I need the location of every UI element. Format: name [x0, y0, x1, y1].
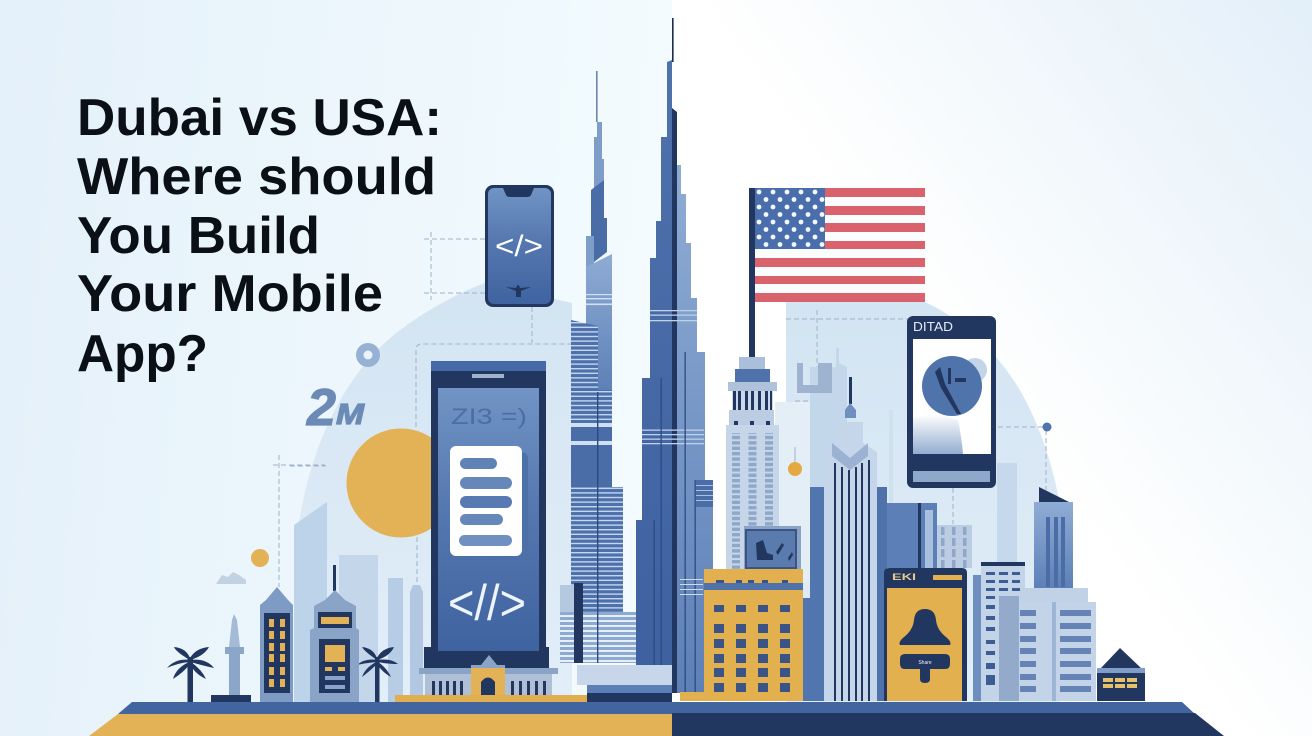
- icon: large sun circle: [346, 428, 456, 538]
- right Burj tower: [636, 18, 713, 693]
- minaret: [211, 614, 251, 702]
- banded office block: [1020, 588, 1096, 701]
- blue blocks right of skyscraper: [803, 487, 972, 701]
- icon: ring: [356, 343, 380, 367]
- label: 2M: 2: [306, 379, 336, 437]
- icon: small sun: [251, 549, 269, 567]
- phone header label: EKI: [892, 572, 916, 582]
- code symbol: </>: [495, 230, 543, 263]
- phone card shadow: [456, 452, 528, 565]
- top phone: [485, 185, 554, 307]
- title: [77, 89, 442, 383]
- palm tree left: [167, 647, 214, 702]
- flag: [749, 188, 925, 357]
- building with antenna: [310, 565, 359, 702]
- background skyline, left: [294, 502, 423, 702]
- palm tree right: [357, 647, 398, 702]
- plane icon: [506, 285, 531, 297]
- window tower: [973, 562, 1025, 701]
- title: Dubai vs USA:: [77, 89, 442, 147]
- tower under flag: [726, 357, 779, 570]
- label: 2M: M: [336, 399, 365, 431]
- notification phone: [884, 568, 967, 701]
- bell clapper button: Share: [918, 660, 932, 666]
- building with orange windows: [260, 587, 293, 702]
- phone screen label: ZI3 =): [451, 404, 527, 429]
- glyph on background building: [797, 363, 832, 393]
- background skyline, right: [775, 348, 1017, 700]
- house: [1097, 648, 1145, 701]
- title: App?: [77, 325, 208, 383]
- label: 2M: [306, 379, 365, 437]
- left Burj tower: [560, 71, 642, 663]
- pale halo shape behind skyline, right: [786, 302, 1060, 702]
- central skyscraper: [824, 377, 877, 701]
- orange building: [680, 569, 803, 701]
- phone card: [450, 446, 522, 556]
- large phone: [424, 361, 549, 668]
- orange dot ornament: [788, 447, 802, 476]
- ground platform: [89, 702, 1224, 736]
- DITAD phone: [907, 316, 996, 488]
- crane node: [1042, 422, 1052, 432]
- pale halo shape behind skyline, left: [294, 283, 572, 702]
- low podium beside towers: [577, 665, 672, 702]
- icon: bell: [900, 609, 950, 645]
- dashed guide lines: [273, 232, 1046, 587]
- title: You Build: [77, 207, 320, 265]
- small display billboard: [744, 526, 801, 569]
- title: Your Mobile: [77, 265, 383, 323]
- code symbol: <//>: [448, 575, 526, 631]
- palace: [395, 655, 587, 702]
- phone brand label: DITAD: [913, 320, 953, 334]
- pointed roof tower: [1034, 487, 1073, 588]
- title: Where should: [77, 148, 436, 206]
- icon: cloud: [216, 572, 246, 584]
